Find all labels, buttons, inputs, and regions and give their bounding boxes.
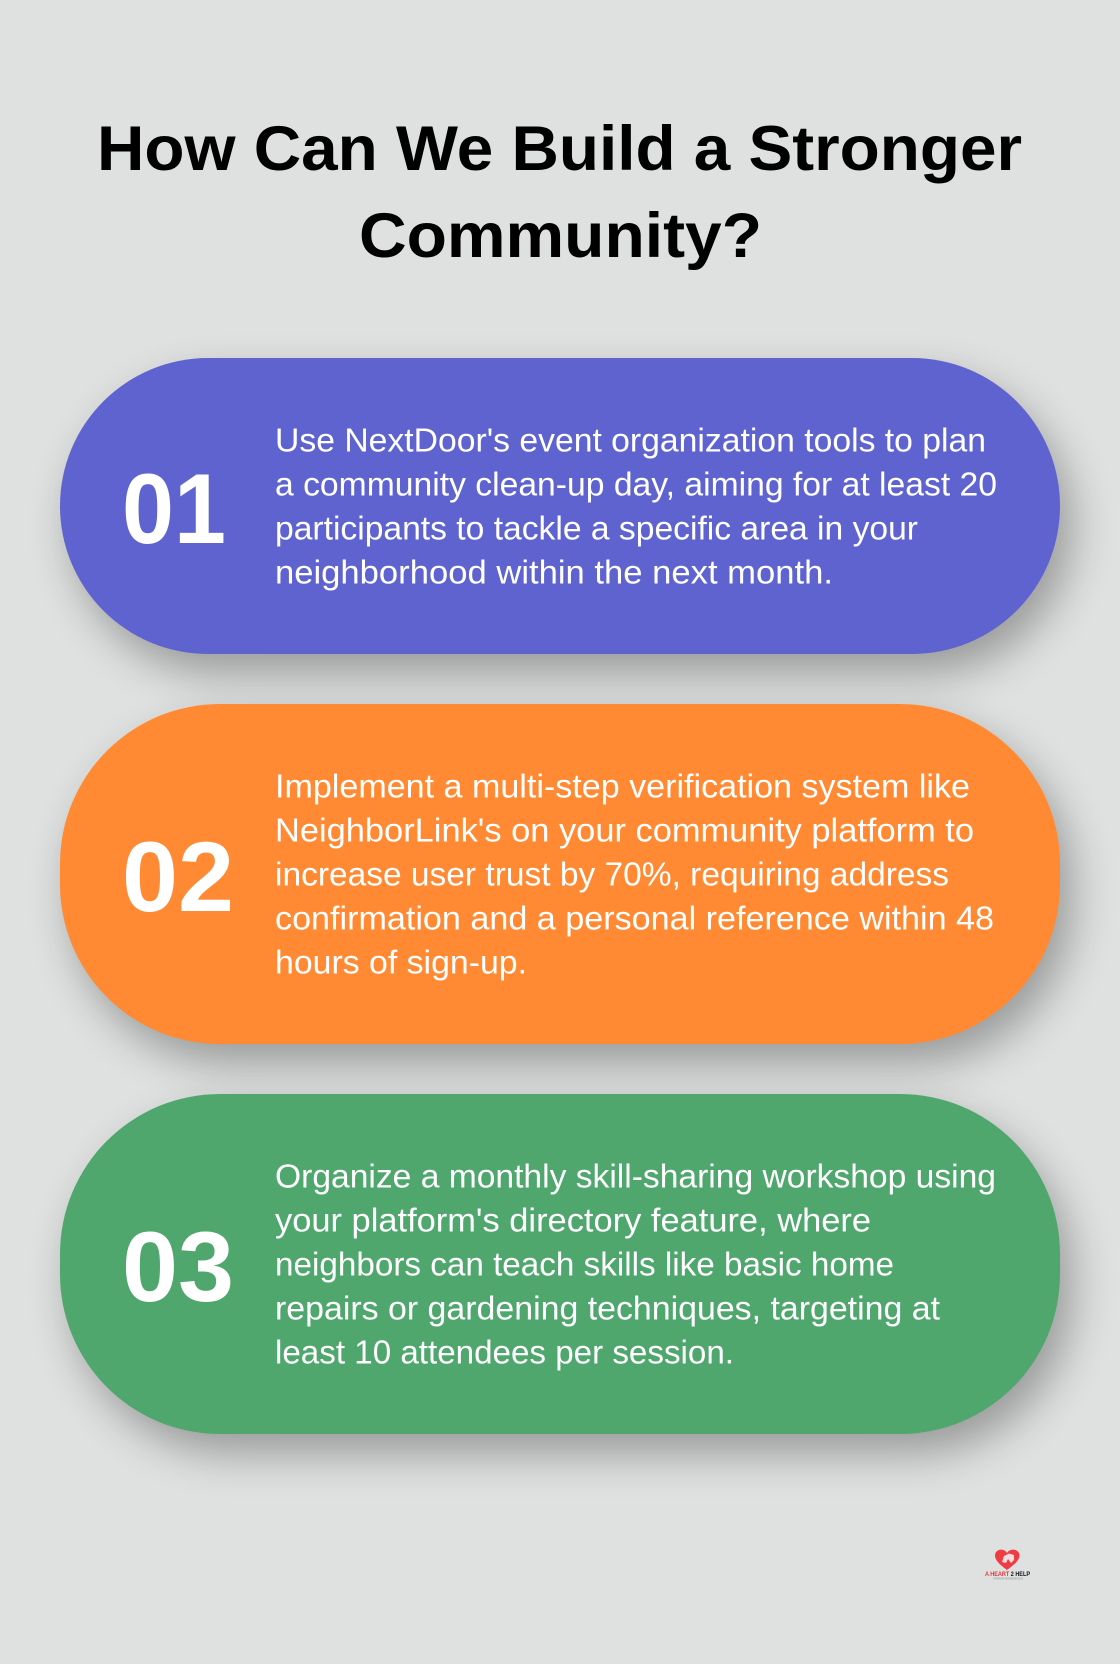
step 03 text: neighbors can teach skills like basic home <box>275 1246 894 1282</box>
icon: A Heart 2 Help logo <box>985 1550 1031 1580</box>
step 03 text: your platform's directory feature, where <box>275 1202 871 1238</box>
step 02 text: Implement a multi-step verification system like <box>275 768 970 804</box>
step 03 number: 03 <box>122 1211 234 1322</box>
step 01 text: neighborhood within the next month. <box>275 554 833 590</box>
step 01 text <box>275 422 997 590</box>
step 03 text: least 10 attendees per session. <box>275 1334 734 1370</box>
title: How Can We Build a Stronger <box>97 114 1022 184</box>
step 02 text: increase user trust by 70%, requiring address <box>275 856 949 892</box>
step 02 text: hours of sign-up. <box>275 944 527 980</box>
icon: A Heart 2 Help logo: STRONGER NEIGHBORHOODS <box>993 1578 1023 1580</box>
panel: step 01 background <box>60 358 1060 654</box>
step 02 text: confirmation and a personal reference within 48 <box>275 900 994 936</box>
step 01 number: 01 <box>122 453 226 564</box>
step 01 text: participants to tackle a specific area in your <box>275 510 918 546</box>
step 02 text: NeighborLink's on your community platform to <box>275 812 974 848</box>
panel: step 02 background <box>60 704 1060 1044</box>
step 01 text: a community clean-up day, aiming for at least 20 <box>275 466 997 502</box>
step 02 number: 02 <box>122 821 234 932</box>
title <box>97 114 1022 271</box>
title: Community? <box>359 201 762 271</box>
step 03 text <box>275 1158 996 1370</box>
step 01 text: Use NextDoor's event organization tools to plan <box>275 422 986 458</box>
step 03 text: repairs or gardening techniques, targeting at <box>275 1290 940 1326</box>
icon: A Heart 2 Help logo: A HEART 2 HELP <box>985 1571 1031 1578</box>
panel: step 03 background <box>60 1094 1060 1434</box>
step 03 text: Organize a monthly skill-sharing workshop using <box>275 1158 996 1194</box>
step 02 text <box>275 768 994 980</box>
